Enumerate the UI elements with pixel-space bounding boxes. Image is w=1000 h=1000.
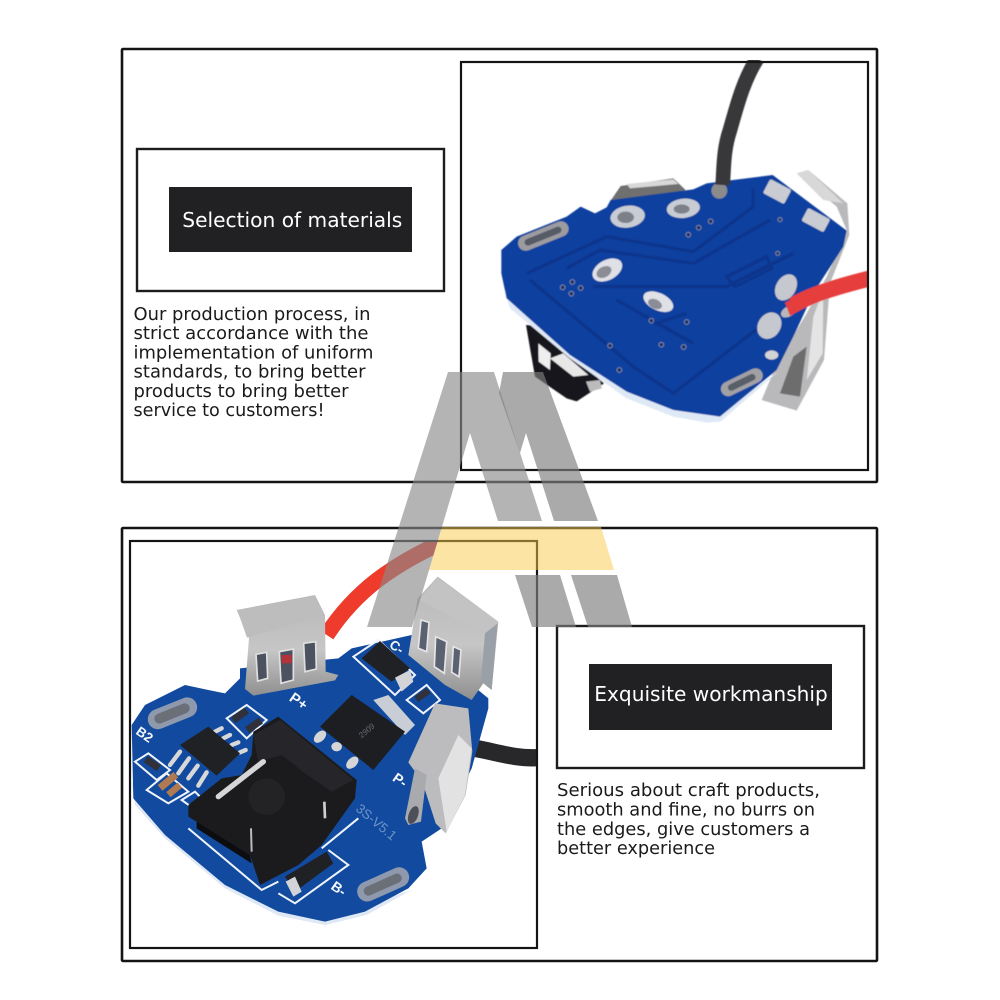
text block: production process: strict accordance with the	[134, 324, 368, 344]
black DC connector	[188, 717, 357, 885]
text block: craft products	[557, 781, 820, 859]
watermark: second peak	[499, 372, 598, 521]
MOSFET	[312, 695, 415, 771]
watermark: yellow band	[429, 527, 614, 570]
copper traces	[527, 188, 793, 393]
metal terminal: left	[237, 595, 338, 696]
silkscreen labels: P-	[390, 769, 411, 791]
silkscreen labels: C-	[387, 637, 407, 657]
diodes	[285, 641, 413, 897]
black wire	[475, 748, 538, 758]
silkscreen labels: B2	[133, 724, 156, 746]
text block: craft products: smooth and fine, no burrs on	[557, 800, 815, 820]
red wire	[779, 278, 870, 320]
red wire	[327, 541, 445, 635]
MOSFET: 2909	[357, 721, 377, 740]
blue circuit board	[132, 635, 488, 922]
black wire	[723, 58, 757, 185]
heading: selection of materials: Selection of materials	[182, 208, 402, 232]
watermark: left leg	[367, 372, 542, 627]
heading: exquisite workmanship	[589, 664, 832, 730]
text block: craft products: the edges, give customers a	[557, 820, 810, 840]
blue circuit board	[501, 175, 847, 417]
photo: circuit board underside	[500, 60, 867, 423]
metal terminal: right	[408, 577, 498, 700]
silkscreen labels: 3S-V5.1	[353, 801, 400, 843]
panel: selection of materials	[122, 49, 877, 482]
text block: production process: Our production process, in	[134, 305, 370, 325]
right metal terminal	[762, 170, 849, 411]
text block: craft products: Serious about craft products,	[557, 781, 820, 801]
text block: craft products: better experience	[557, 839, 715, 859]
label frame: exquisite workmanship	[557, 626, 864, 768]
silkscreen labels: B-	[328, 878, 350, 899]
vias	[560, 218, 782, 372]
text block: production process: standards, to bring better	[134, 362, 366, 382]
photo frame: bottom	[130, 541, 537, 948]
heading: exquisite workmanship: Exquisite workmanship	[594, 682, 828, 706]
heading: selection of materials	[169, 187, 412, 252]
watermark: lower stripes	[515, 575, 632, 627]
silkscreen labels: P+	[286, 690, 310, 714]
board edge	[132, 782, 412, 925]
IC chip	[170, 727, 246, 786]
black connector	[526, 325, 604, 401]
rear metal tab	[610, 178, 685, 202]
panel: exquisite workmanship	[122, 528, 877, 961]
label frame: selection of materials	[137, 149, 444, 291]
text block: production process: implementation of uniform	[134, 343, 374, 363]
solder pads and silkscreen	[135, 640, 440, 905]
photo frame: top	[461, 62, 868, 470]
text block: production process: service to customers!	[134, 401, 324, 421]
silkscreen labels	[133, 637, 411, 899]
board edge	[504, 290, 778, 423]
text block: production process: products to bring better	[134, 382, 349, 402]
watermark logo	[367, 372, 632, 627]
metal terminal: lower right	[405, 703, 472, 833]
photo: circuit board top	[130, 541, 538, 948]
solder pads	[516, 179, 830, 399]
text block: production process	[134, 305, 374, 421]
